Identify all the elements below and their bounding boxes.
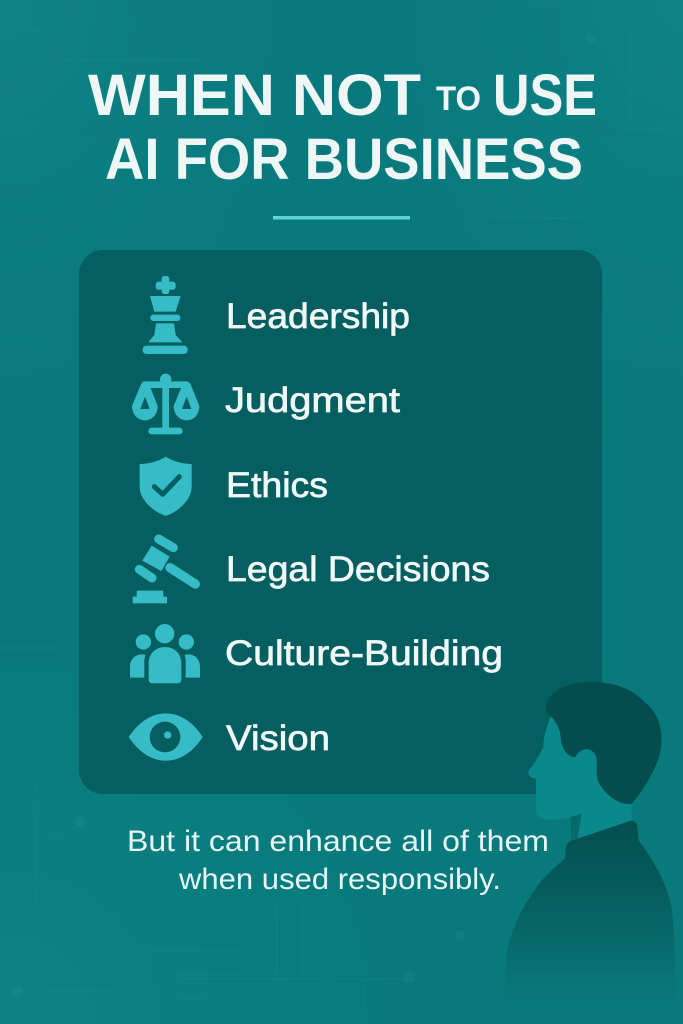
icon: chess king: [143, 276, 188, 354]
neck shadow: [571, 813, 583, 845]
label: Culture-Building: Culture-Building: [225, 634, 503, 673]
icon: shield with check: [140, 457, 192, 516]
closing note: when used responsibly.: [178, 863, 501, 896]
label: Vision: Vision: [226, 719, 330, 758]
icon: scales of justice: [132, 374, 199, 434]
title: USE: [493, 63, 597, 128]
title: [88, 63, 597, 192]
hair: [546, 682, 661, 804]
label: Judgment: Judgment: [225, 381, 400, 420]
label: Legal Decisions: Legal Decisions: [226, 550, 490, 589]
closing note: But it can enhance all of them: [127, 825, 549, 858]
face and neck: [528, 717, 632, 840]
person silhouette: [505, 682, 675, 1024]
title divider: [273, 216, 410, 220]
label: Ethics: Ethics: [226, 466, 328, 505]
title: WHEN NOT: [88, 63, 421, 128]
title: TO: [436, 80, 481, 118]
icon: eye: [129, 713, 203, 761]
panel: list of human-only areas: [79, 250, 602, 794]
title: AI FOR BUSINESS: [105, 127, 583, 192]
body: [505, 821, 675, 1024]
label: Leadership: Leadership: [226, 297, 410, 336]
icon: gavel: [133, 539, 195, 603]
closing note: [127, 825, 549, 896]
icon: group of people: [130, 624, 200, 683]
